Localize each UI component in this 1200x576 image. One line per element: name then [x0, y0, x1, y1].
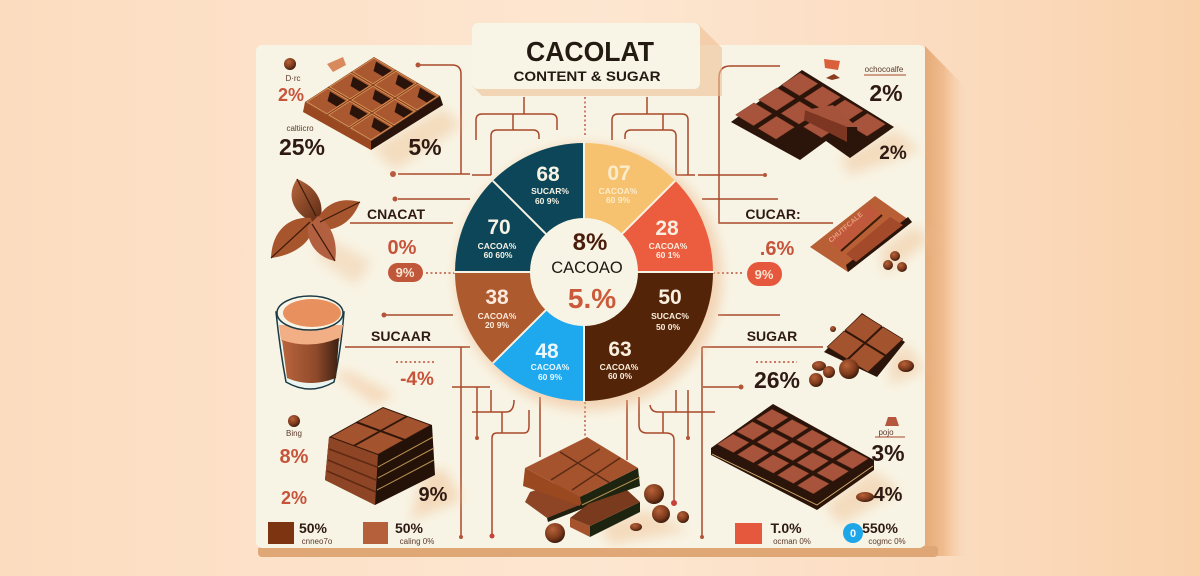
segment label 48: 48 [535, 340, 559, 363]
icon: chocolate piece, top left [327, 57, 346, 72]
chocolate bar: bottom right [711, 404, 900, 525]
legend: right swatches [735, 520, 906, 546]
legend: left swatches [268, 520, 434, 546]
segment label 50: 50 0% [656, 322, 680, 332]
pie chart [454, 142, 722, 410]
legend: right swatches: 550% [862, 520, 898, 536]
pill: right 9 percent [747, 262, 782, 286]
segment: dark brown 50 and 63 [584, 272, 713, 401]
icon: bean, top left [284, 58, 296, 70]
label: minus 4 percent: -4% [400, 369, 434, 390]
segment label 70: 70 [487, 216, 511, 239]
segment label 28 [649, 217, 688, 260]
icon: glass of cocoa [276, 296, 395, 405]
chocolate bar: diagonal ridged [810, 196, 930, 275]
callout: lower-right labels: 3% [871, 440, 905, 466]
segment label 48 [531, 340, 570, 382]
label: SUGAR: SUGAR [747, 328, 797, 344]
connector dots [382, 62, 767, 539]
label: 6 percent: .6% [760, 238, 794, 260]
segment label 68 [531, 163, 569, 206]
chocolate bar: top right [731, 70, 920, 175]
callout: top-left labels: 5% [408, 134, 442, 160]
title: main word: CACOLAT [526, 36, 654, 67]
label: SUCAAR: SUCAAR [371, 328, 431, 344]
segment label 70: 60 60% [484, 250, 513, 260]
callout: top-left labels: D·rc [285, 74, 301, 83]
callout: lower-left labels: Bing [286, 429, 302, 438]
segment label 68: 60 9% [535, 196, 559, 206]
segment label 38 [478, 286, 517, 330]
legend: left swatches: cnneo7o [302, 537, 333, 546]
segment label 68: SUCAR% [531, 186, 569, 196]
segment label 50: 50 [658, 286, 682, 309]
segment label 68: 68 [536, 163, 560, 186]
chocolate chunk with beans [809, 313, 925, 387]
segment label 63: 63 [608, 338, 632, 361]
chocolate bar: diagonal ridged: CHUTFCALE [828, 211, 865, 245]
centre circle [530, 218, 638, 326]
legend: right swatches: 0 [850, 528, 856, 540]
segment dividers [454, 142, 714, 402]
legend: right swatches: ocman 0% [773, 537, 811, 546]
callout: lower-right labels: 4% [874, 484, 903, 506]
segment label 63 [600, 338, 639, 381]
subtitle: CONTENT & SUGAR [514, 68, 660, 84]
segment label 07 [599, 162, 638, 205]
centre label: word: CACOAO [551, 259, 623, 277]
label: CNACAT: CNACAT [367, 206, 425, 222]
segment label 63: 60 0% [608, 371, 632, 381]
segment label 70 [478, 216, 517, 260]
segment label 07: 60 9% [606, 195, 630, 205]
segment: yellow 07 [584, 143, 675, 272]
callout: top-left labels: caltiicro [286, 124, 314, 133]
segment label 38: 38 [485, 286, 509, 309]
chocolate bar: top left [303, 57, 462, 170]
dotted connectors [396, 97, 797, 436]
legend: left swatches: 50% [395, 520, 424, 536]
segment label 50: SUCAC% [651, 311, 689, 321]
legend: right swatches: T.0% [770, 520, 802, 536]
connector lines [345, 65, 906, 537]
label: CUCAR: CUCAR: [745, 206, 801, 222]
callout: top-left labels [278, 74, 442, 160]
pill: left 9 percent: 9% [396, 265, 415, 280]
label: 0 percent: 0% [388, 237, 417, 259]
callout: top-right labels [865, 65, 907, 164]
segment label 50 [651, 286, 689, 332]
segment label 28: 60 1% [656, 250, 680, 260]
pill: right 9 percent: 9% [755, 267, 774, 282]
callout: lower-right labels [856, 417, 905, 506]
label: 26 percent: 26% [754, 367, 800, 393]
segment: teal 70 and 68 [455, 143, 584, 272]
callout: top-right labels: 2% [879, 143, 907, 164]
callout: lower-left labels: 2% [281, 488, 307, 508]
segment label 07: 07 [607, 162, 631, 185]
icon: cocoa leaves [271, 179, 372, 285]
legend: right swatches: cogmc 0% [868, 537, 906, 546]
segment: brown 38 [455, 272, 584, 363]
segment label 48: CACOA% [531, 362, 570, 372]
legend: left swatches: 50% [299, 520, 328, 536]
pill: left 9 percent [388, 263, 423, 282]
centre label: top figure: 8% [573, 229, 607, 256]
legend: left swatches: caling 0% [400, 537, 434, 546]
segment: red 28 [584, 181, 713, 272]
segment label 70: CACOA% [478, 241, 517, 251]
callout: lower-left labels: 9% [419, 484, 448, 506]
callout: lower-left labels: 8% [280, 446, 309, 468]
callout: top-right labels: ochocoalfe [865, 65, 904, 74]
panel: main card [256, 45, 925, 548]
callout: top-left labels: 25% [279, 134, 325, 160]
segment label 28: 28 [655, 217, 679, 240]
chocolate stack: left [325, 407, 462, 520]
icon: chocolate crumbs, top right [824, 59, 840, 80]
callout: top-left labels: 2% [278, 85, 304, 105]
callout: top-right labels: 2% [869, 80, 903, 106]
segment label 63: CACOA% [600, 362, 639, 372]
segment: blue 48 [493, 272, 584, 401]
callout: lower-left labels [280, 415, 448, 508]
segment label 07: CACOA% [599, 186, 638, 196]
panel depth [258, 46, 968, 557]
segment label 38: CACOA% [478, 311, 517, 321]
centre label: bottom figure: 5.% [568, 283, 616, 314]
segment label 38: 20 9% [485, 320, 509, 330]
segment label 48: 60 9% [538, 372, 562, 382]
title card [472, 23, 722, 96]
segment label 28: CACOA% [649, 241, 688, 251]
chocolate pieces: bottom centre [523, 437, 690, 545]
callout: lower-right labels: pojo [878, 428, 894, 437]
